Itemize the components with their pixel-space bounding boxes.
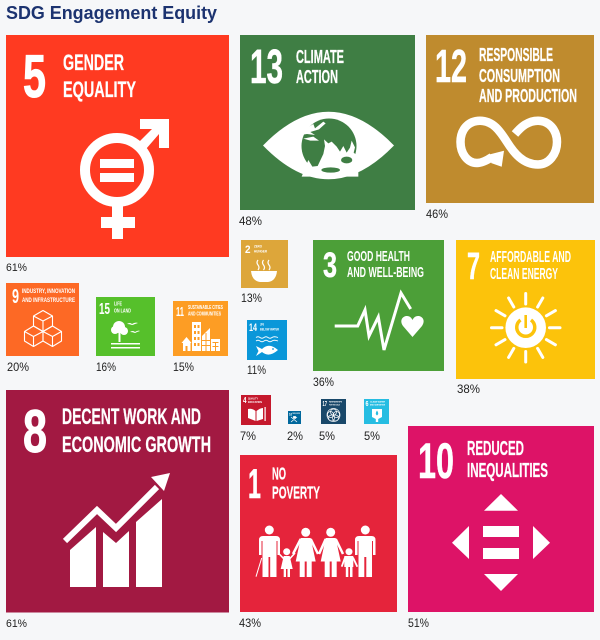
panel: goal 1 no poverty bbox=[240, 455, 397, 612]
goal 3 heading: AND WELL-BEING bbox=[347, 264, 424, 281]
percent: goal 3: 36% bbox=[313, 375, 334, 389]
goal number 8: 8 bbox=[23, 398, 47, 465]
goal number 12: 12 bbox=[435, 40, 467, 92]
goal 1 heading: POVERTY bbox=[272, 483, 320, 503]
goal number 11: 11 bbox=[176, 304, 184, 319]
goal 6 heading bbox=[370, 400, 386, 406]
goal number 2: 2 bbox=[245, 244, 250, 256]
goal 6 heading: CLEAN WATER bbox=[370, 400, 386, 404]
goal 3 heading: GOOD HEALTH bbox=[347, 248, 410, 265]
goal 2 heading: HUNGER bbox=[254, 248, 267, 254]
panel: goal 17 partnerships bbox=[321, 399, 346, 424]
percent: goal 4: 7% bbox=[240, 429, 256, 443]
percent: goal 13: 48% bbox=[239, 214, 262, 228]
panel: goal 8 decent work bbox=[6, 390, 229, 612]
goal 17 heading bbox=[329, 400, 343, 406]
icon: gender equality symbol bbox=[85, 119, 169, 239]
goal 13 heading: CLIMATE bbox=[296, 47, 344, 67]
icon: partnership flower bbox=[327, 408, 340, 422]
icon: open book bbox=[248, 407, 266, 421]
goal number 6: 6 bbox=[366, 401, 369, 408]
percent: goal 9: 20% bbox=[7, 360, 29, 374]
goal 16 heading: PEACE, JUSTICE bbox=[292, 412, 300, 415]
goal 4 heading: QUALITY bbox=[248, 398, 258, 400]
goal 9 heading bbox=[22, 288, 75, 304]
goal 6 heading: AND SANITATION bbox=[370, 404, 385, 406]
goal number 17: 17 bbox=[322, 401, 327, 408]
percent: goal 11: 15% bbox=[173, 360, 194, 374]
goal 14 heading: LIFE bbox=[260, 323, 264, 327]
goal 15 heading: LIFE bbox=[114, 302, 122, 308]
goal 14 heading bbox=[260, 323, 279, 332]
goal 1 heading: NO bbox=[272, 464, 286, 484]
percent: goal 8: 61% bbox=[6, 618, 27, 630]
goal 17 heading: PARTNERSHIPS bbox=[329, 400, 343, 404]
goal 11 heading: AND COMMUNITIES bbox=[188, 312, 221, 318]
panel: goal 14 life below water bbox=[247, 320, 287, 360]
panel: goal 6 clean water bbox=[364, 399, 389, 424]
icon: infinity loop arrow bbox=[460, 121, 557, 167]
goal 4 heading bbox=[248, 398, 262, 404]
icon: tree and birds bbox=[111, 321, 140, 348]
goal number 15: 15 bbox=[99, 301, 110, 318]
goal 9 heading: AND INFRASTRUCTURE bbox=[22, 297, 75, 304]
panel: goal 12 responsible consumption bbox=[426, 35, 594, 203]
icon: eye with globe bbox=[263, 112, 394, 179]
goal 13 heading bbox=[296, 47, 344, 87]
goal 8 heading bbox=[62, 404, 211, 457]
percent: goal 16: 2% bbox=[287, 429, 303, 443]
goal 11 heading: SUSTAINABLE CITIES bbox=[188, 305, 223, 311]
panel: goal 13 climate action bbox=[240, 35, 415, 210]
goal number 13: 13 bbox=[250, 41, 283, 94]
goal 8 heading: DECENT WORK AND bbox=[62, 404, 201, 429]
percent: goal 15: 16% bbox=[96, 360, 116, 374]
goal 9 heading: INDUSTRY, INNOVATION bbox=[22, 288, 75, 295]
goal 14 heading: BELOW WATER bbox=[260, 328, 279, 332]
icon: fish and waves bbox=[256, 337, 278, 356]
icon: stacked cubes bbox=[24, 310, 62, 346]
goal 3 heading bbox=[347, 248, 424, 281]
icon: water glass with drop bbox=[372, 409, 382, 422]
goal 10 heading bbox=[467, 438, 548, 482]
icon: dove and gavel bbox=[291, 416, 297, 422]
percent: goal 14: 11% bbox=[247, 363, 266, 377]
panel: goal 4 quality education bbox=[241, 395, 271, 425]
goal 2 heading: ZERO bbox=[254, 244, 262, 248]
panel: goal 2 zero hunger bbox=[241, 240, 288, 288]
goal 1 heading bbox=[272, 464, 320, 503]
goal number 10: 10 bbox=[418, 433, 454, 489]
goal number 9: 9 bbox=[12, 286, 19, 308]
percent: goal 17: 5% bbox=[319, 429, 335, 443]
title: SDG Engagement Equity bbox=[6, 3, 217, 23]
goal 5 heading: EQUALITY bbox=[63, 77, 136, 102]
panel: goal 3 good health bbox=[313, 240, 444, 371]
icon: rising bar chart with arrow bbox=[65, 473, 170, 587]
goal 2 heading bbox=[254, 244, 267, 254]
goal 11 heading bbox=[188, 305, 223, 318]
goal 8 heading: ECONOMIC GROWTH bbox=[62, 432, 211, 457]
icon: heartbeat and heart bbox=[335, 293, 424, 350]
panel: goal 5 gender equality bbox=[6, 35, 229, 257]
goal 7 heading bbox=[490, 249, 571, 283]
goal number 3: 3 bbox=[323, 246, 337, 285]
goal 12 heading bbox=[479, 45, 577, 106]
goal number 7: 7 bbox=[467, 246, 480, 288]
goal number 4: 4 bbox=[243, 396, 247, 405]
goal number 1: 1 bbox=[248, 460, 261, 507]
percent: goal 1: 43% bbox=[239, 616, 261, 630]
percent: goal 12: 46% bbox=[426, 207, 448, 221]
panel: goal 11 sustainable cities bbox=[173, 301, 228, 356]
goal 13 heading: ACTION bbox=[296, 67, 338, 87]
goal number 5: 5 bbox=[23, 43, 46, 110]
goal 17 heading: FOR THE GOALS bbox=[329, 404, 340, 406]
goal 15 heading: ON LAND bbox=[114, 309, 131, 315]
percent: goal 7: 38% bbox=[457, 382, 480, 396]
icon: city buildings bbox=[182, 322, 220, 351]
goal 5 heading bbox=[63, 50, 136, 102]
percent: goal 6: 5% bbox=[364, 429, 380, 443]
panel: goal 10 reduced inequalities bbox=[408, 426, 594, 612]
goal 10 heading: REDUCED bbox=[467, 438, 524, 460]
goal number 16: 16 bbox=[289, 412, 292, 416]
icon: sun with power symbol bbox=[492, 294, 560, 362]
icon: family figures bbox=[256, 526, 376, 577]
percent: goal 10: 51% bbox=[408, 616, 429, 630]
goal 5 heading: GENDER bbox=[63, 50, 124, 75]
percent: goal 2: 13% bbox=[241, 291, 262, 305]
percent: goal 5: 61% bbox=[6, 262, 27, 274]
goal 15 heading bbox=[114, 302, 131, 315]
goal number 14: 14 bbox=[249, 322, 258, 334]
icon: steaming bowl bbox=[251, 260, 277, 282]
goal 4 heading: EDUCATION bbox=[248, 401, 262, 404]
panel: goal 9 industry bbox=[6, 283, 79, 356]
panel: goal 15 life on land bbox=[96, 297, 155, 356]
panel: goal 7 clean energy bbox=[456, 240, 595, 379]
icon: equals sign with four arrows bbox=[452, 494, 550, 591]
panel: goal 16 peace and justice bbox=[288, 411, 301, 424]
